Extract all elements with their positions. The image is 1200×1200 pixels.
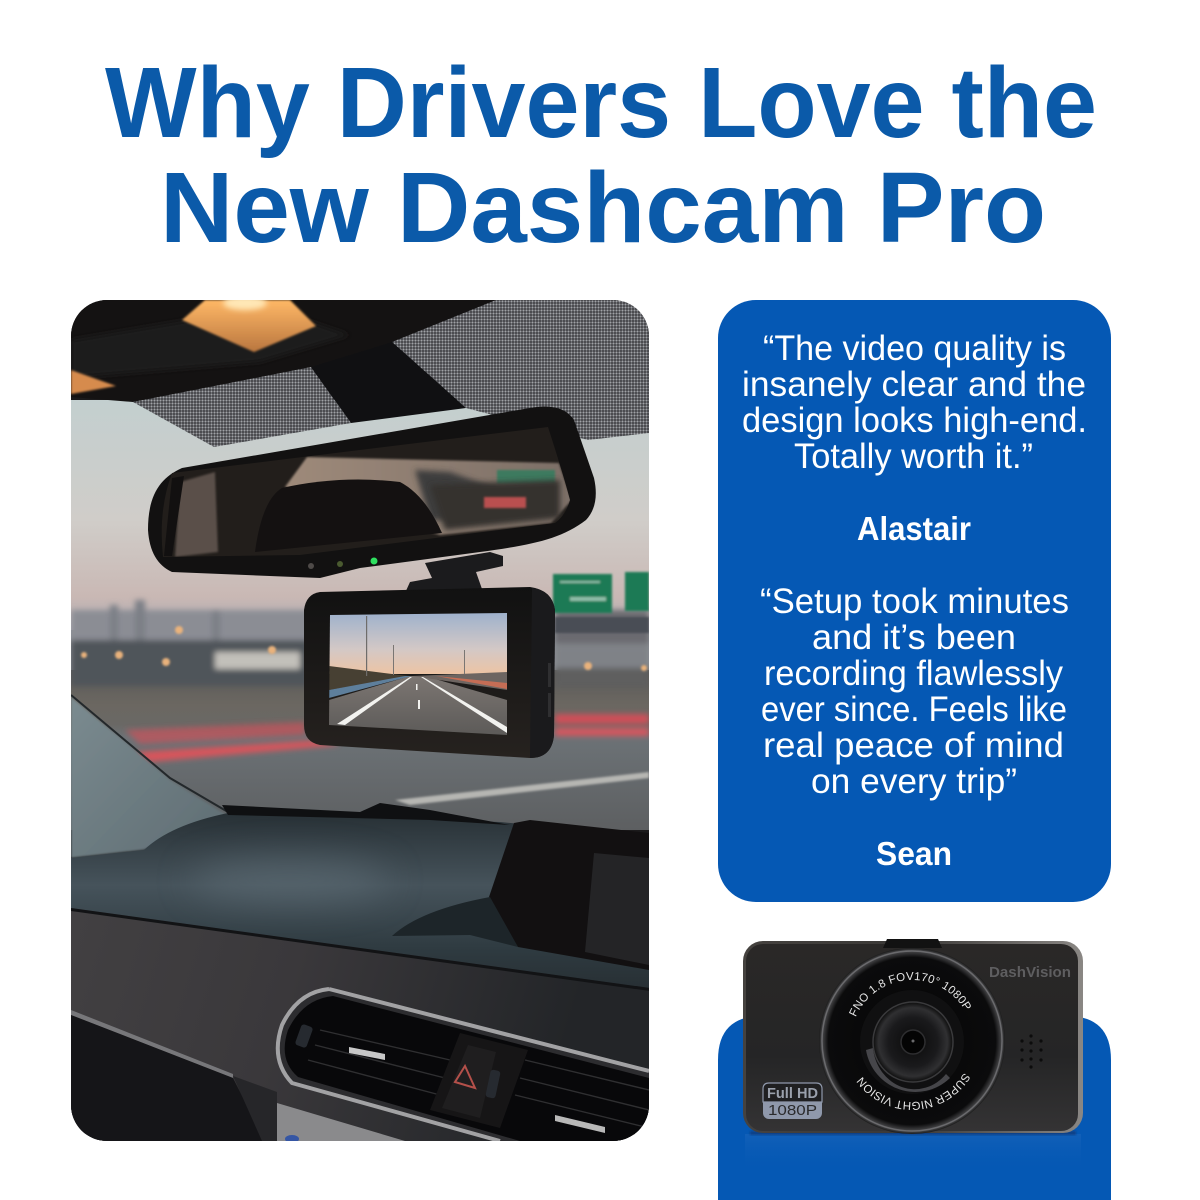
Full HD badge: 1080P bbox=[768, 1103, 817, 1119]
lens ring text: FNO 1.8 FOV170° 1080P bbox=[849, 972, 971, 1016]
quote: Alastair: design looks high-end. bbox=[742, 401, 1087, 440]
chrome trim strip bbox=[71, 1010, 233, 1078]
mirror indicator LEDs bbox=[370, 558, 378, 564]
speaker holes bbox=[1020, 1034, 1043, 1069]
A-pillar bbox=[71, 697, 228, 858]
product: DashVision camera bbox=[743, 939, 1083, 1134]
quote: Sean: and it’s been bbox=[812, 618, 1016, 657]
dash display hood bbox=[488, 820, 649, 970]
quote: Sean: recording flawlessly bbox=[764, 654, 1063, 693]
quote: Alastair: “The video quality is bbox=[763, 329, 1066, 368]
attribution: Sean: Sean bbox=[876, 835, 952, 872]
quote: Sean bbox=[760, 582, 1069, 801]
highway signs bbox=[553, 572, 649, 633]
photo: dashcam mounted in car interior bbox=[71, 296, 650, 1143]
quote: Alastair: Totally worth it.” bbox=[794, 437, 1033, 476]
title bbox=[105, 47, 1097, 264]
rear-view mirror bbox=[148, 406, 596, 578]
air vents and hazard switch bbox=[278, 989, 649, 1141]
overhead console and windshield frit bbox=[71, 300, 496, 402]
quote: Sean: on every trip” bbox=[811, 762, 1017, 801]
dashcam on mirror bbox=[304, 587, 555, 758]
Full HD badge: Full HD bbox=[767, 1085, 818, 1102]
road marking bbox=[395, 772, 649, 805]
title: New Dashcam Pro bbox=[160, 152, 1046, 264]
dashboard bbox=[71, 813, 649, 1141]
dashcam screen bbox=[329, 612, 508, 736]
quote: Sean: “Setup took minutes bbox=[760, 582, 1069, 621]
quote: Sean: ever since. Feels like bbox=[761, 690, 1067, 729]
testimonial panel bbox=[718, 300, 1111, 902]
Full HD badge bbox=[763, 1083, 822, 1119]
quote: Alastair bbox=[742, 329, 1087, 476]
blue product backdrop bbox=[718, 1016, 1111, 1200]
quote: Sean: real peace of mind bbox=[763, 726, 1064, 765]
lens bbox=[820, 948, 1004, 1134]
dome lights bbox=[182, 300, 316, 352]
lens: SUPER NIGHT VISION bbox=[856, 1074, 970, 1110]
windshield wiper bbox=[222, 803, 510, 825]
brand label: DashVision bbox=[989, 964, 1071, 981]
mirror mount bbox=[405, 552, 503, 593]
tail light streaks bbox=[125, 714, 649, 762]
quote: Alastair: insanely clear and the bbox=[742, 365, 1086, 404]
attribution: Alastair: Alastair bbox=[857, 510, 971, 547]
camera reflection bbox=[745, 1131, 1081, 1172]
title: Why Drivers Love the bbox=[105, 47, 1097, 159]
